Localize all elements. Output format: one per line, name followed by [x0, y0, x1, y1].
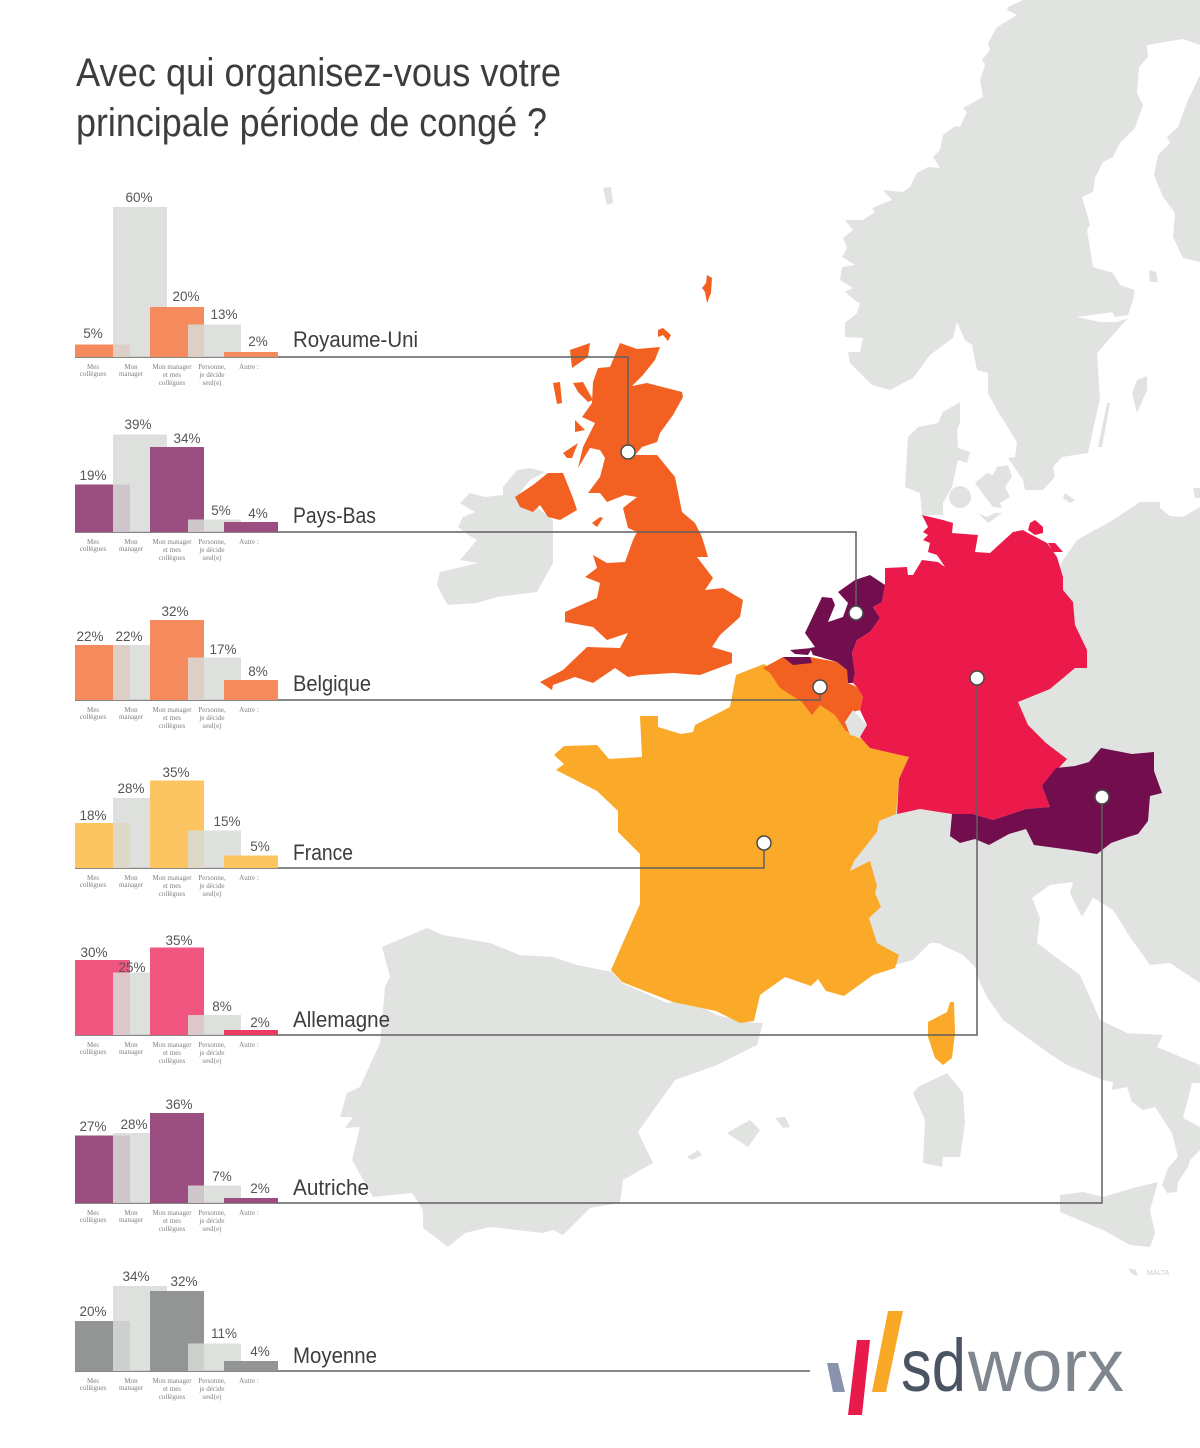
bar chart: Autriche: collègues	[159, 1225, 185, 1233]
bar chart: France: Personne,	[198, 874, 226, 882]
bar chart: Moyenne: Mon manager	[152, 1377, 192, 1385]
bar chart: Royaume-Uni: 5%	[83, 326, 103, 341]
bar chart: Moyenne: et mes	[163, 1385, 181, 1393]
connector: Royaume-Uni	[75, 357, 635, 459]
bar chart: Allemagne: Mes	[87, 1041, 99, 1049]
connector: Allemagne	[75, 671, 984, 1035]
bar chart: France: 18%	[79, 808, 107, 823]
bar chart: France: 5%	[250, 839, 270, 854]
bar chart: Belgique: Mon	[124, 706, 138, 714]
title	[76, 51, 561, 145]
bar chart: Pays-Bas	[75, 417, 376, 562]
bar chart: Allemagne	[75, 933, 390, 1065]
map: small map caption: MALTA	[1147, 1270, 1170, 1277]
bar chart: Moyenne: Mon	[124, 1377, 138, 1385]
bar chart: France: collègues	[80, 881, 106, 889]
bar chart: Allemagne: 25%	[118, 960, 146, 975]
bar chart: Royaume-Uni: 2%	[248, 334, 268, 349]
bar chart: Allemagne: Autre :	[239, 1041, 259, 1049]
bar chart: Belgique: Belgique	[293, 671, 371, 696]
bar chart: France	[75, 765, 353, 898]
bar chart: France: France	[293, 840, 353, 865]
bar chart: Royaume-Uni: 20%	[172, 289, 200, 304]
bar chart: Royaume-Uni: Mon	[124, 363, 138, 371]
bar chart: Autriche: seul(e)	[202, 1225, 222, 1233]
bar chart: Allemagne: collègues	[80, 1048, 106, 1056]
bar chart: Royaume-Uni: je décide	[198, 371, 225, 379]
bar chart: France: Mon manager	[152, 874, 192, 882]
bar chart: Allemagne: je décide	[198, 1049, 225, 1057]
bar chart: Autriche: 2%	[250, 1181, 270, 1196]
bar chart: Allemagne: et mes	[163, 1049, 181, 1057]
bar chart: Belgique: Personne,	[198, 706, 226, 714]
bar chart: Pays-Bas: Mes	[87, 538, 99, 546]
bar chart: Moyenne: je décide	[198, 1385, 225, 1393]
bar chart: Royaume-Uni: Autre :	[239, 363, 259, 371]
bar chart: Moyenne: Personne,	[198, 1377, 226, 1385]
bar chart: Autriche: je décide	[198, 1217, 225, 1225]
bar chart: Pays-Bas: collègues	[159, 554, 185, 562]
bar chart: Pays-Bas: je décide	[198, 546, 225, 554]
bar chart: Belgique: 22%	[76, 629, 104, 644]
bar chart: Pays-Bas: 39%	[124, 417, 152, 432]
bar chart: Autriche: Mes	[87, 1209, 99, 1217]
bar chart: Pays-Bas: 34%	[173, 431, 201, 446]
bar chart: Pays-Bas: Mon	[124, 538, 138, 546]
bar chart: Autriche: Mon manager	[152, 1209, 192, 1217]
bar chart: Belgique: 22%	[115, 629, 143, 644]
bar chart: Belgique: 17%	[209, 642, 237, 657]
bar chart: Moyenne: Mes	[87, 1377, 99, 1385]
bar chart: France: Autre :	[239, 874, 259, 882]
bar chart: France: Mes	[87, 874, 99, 882]
map: Belgique	[763, 657, 863, 735]
bar chart: Moyenne: collègues	[159, 1393, 185, 1401]
bar chart: Royaume-Uni: et mes	[163, 371, 181, 379]
bar chart: France: et mes	[163, 882, 181, 890]
bar chart: Pays-Bas: Mon manager	[152, 538, 192, 546]
bar chart: Autriche: 27%	[79, 1119, 107, 1134]
bar chart: Autriche: Mon	[124, 1209, 138, 1217]
bar chart: Belgique: je décide	[198, 714, 225, 722]
connector: Moyenne	[75, 1370, 810, 1372]
map: Pays-Bas	[783, 575, 885, 683]
bar chart: France: 35%	[162, 765, 190, 780]
bar chart: Moyenne: 34%	[122, 1269, 150, 1284]
bar chart: Allemagne: collègues	[159, 1057, 185, 1065]
bar chart: Royaume-Uni: collègues	[80, 370, 106, 378]
bar chart: Pays-Bas: 5%	[211, 503, 231, 518]
map: Luxembourg	[845, 710, 867, 737]
logo: sdworx	[827, 1311, 1124, 1415]
map: grey Europe background	[340, 0, 1200, 1276]
bar chart: Belgique: collègues	[80, 713, 106, 721]
bar chart: Belgique: 8%	[248, 664, 268, 679]
bar chart: Autriche: 28%	[120, 1117, 148, 1132]
logo: sdworx: sd	[901, 1324, 966, 1407]
bar chart: Pays-Bas: et mes	[163, 546, 181, 554]
bar chart: Royaume-Uni	[75, 190, 418, 387]
bar chart: France: je décide	[198, 882, 225, 890]
bar chart: Moyenne: 11%	[211, 1326, 237, 1341]
bar chart: Pays-Bas: manager	[119, 545, 144, 553]
bar chart: Allemagne: Mon	[124, 1041, 138, 1049]
bar chart: Moyenne: collègues	[80, 1384, 106, 1392]
map: Autriche	[950, 748, 1162, 854]
bar chart: Allemagne: Personne,	[198, 1041, 226, 1049]
bar chart: France: 15%	[213, 814, 241, 829]
bar chart: Moyenne: seul(e)	[202, 1393, 222, 1401]
bar chart: Royaume-Uni: Royaume-Uni	[293, 327, 418, 352]
bar chart: France: seul(e)	[202, 890, 222, 898]
connector: Autriche	[75, 790, 1109, 1203]
bar chart: Belgique: Mes	[87, 706, 99, 714]
connector: Belgique	[75, 680, 827, 700]
bar chart: Moyenne: Moyenne	[293, 1343, 377, 1368]
bar chart: Belgique: collègues	[159, 722, 185, 730]
bar chart: Royaume-Uni: manager	[119, 370, 144, 378]
bar chart: Autriche: collègues	[80, 1216, 106, 1224]
connector: Pays-Bas	[75, 532, 863, 620]
map: Royaume-Uni	[515, 275, 743, 690]
bar chart: Moyenne: Autre :	[239, 1377, 259, 1385]
bar chart: Moyenne	[75, 1269, 377, 1401]
bar chart: Royaume-Uni: seul(e)	[202, 379, 222, 387]
map: France	[554, 664, 955, 1065]
bar chart: Pays-Bas: Pays-Bas	[293, 503, 376, 528]
bar chart: Allemagne: 2%	[250, 1015, 270, 1030]
bar chart: Moyenne: 4%	[250, 1344, 270, 1359]
bar chart: Moyenne: 32%	[170, 1274, 198, 1289]
bar chart: Pays-Bas: 19%	[79, 468, 107, 483]
bar chart: Autriche: 36%	[165, 1097, 193, 1112]
bar chart: Royaume-Uni: collègues	[159, 379, 185, 387]
bar chart: Pays-Bas: Autre :	[239, 538, 259, 546]
bar chart: Belgique: manager	[119, 713, 144, 721]
bar chart: Allemagne: 35%	[165, 933, 193, 948]
bar chart: Autriche: 7%	[212, 1169, 232, 1184]
bar chart: Belgique: Autre :	[239, 706, 259, 714]
bar chart: Autriche	[75, 1097, 369, 1233]
bar chart: Allemagne: 8%	[212, 999, 232, 1014]
bar chart: Pays-Bas: Personne,	[198, 538, 226, 546]
connector: France	[75, 836, 771, 868]
bar chart: Autriche: Autriche	[293, 1175, 369, 1200]
bar chart: Pays-Bas: 4%	[248, 506, 268, 521]
bar chart: Allemagne: Allemagne	[293, 1007, 390, 1032]
bar chart: Royaume-Uni: 13%	[210, 307, 238, 322]
title: Avec qui organisez-vous votre	[76, 51, 561, 95]
bar chart: Royaume-Uni: Mon manager	[152, 363, 192, 371]
bar chart: Allemagne: Mon manager	[152, 1041, 192, 1049]
logo: sdworx: worx	[967, 1324, 1124, 1407]
bar chart: Pays-Bas: seul(e)	[202, 554, 222, 562]
bar chart: France: Mon	[124, 874, 138, 882]
bar chart: Pays-Bas: collègues	[80, 545, 106, 553]
bar chart: Moyenne: 20%	[79, 1304, 107, 1319]
bar chart: Allemagne: manager	[119, 1048, 144, 1056]
bar chart: Belgique: Mon manager	[152, 706, 192, 714]
bar chart: Allemagne: 30%	[80, 945, 108, 960]
bar chart: Royaume-Uni: Personne,	[198, 363, 226, 371]
bar chart: Belgique: 32%	[161, 604, 189, 619]
bar chart: Autriche: Personne,	[198, 1209, 226, 1217]
bar chart: Royaume-Uni: Mes	[87, 363, 99, 371]
bar chart: Belgique: seul(e)	[202, 722, 222, 730]
bar chart: France: collègues	[159, 890, 185, 898]
bar chart: Belgique	[75, 604, 371, 730]
bar chart: Allemagne: seul(e)	[202, 1057, 222, 1065]
bar chart: France: manager	[119, 881, 144, 889]
bar chart: Autriche: Autre :	[239, 1209, 259, 1217]
bar chart: Autriche: et mes	[163, 1217, 181, 1225]
bar chart: France: 28%	[117, 781, 145, 796]
bar chart: Royaume-Uni: 60%	[125, 190, 153, 205]
map: Allemagne	[852, 515, 1087, 820]
bar chart: Autriche: manager	[119, 1216, 144, 1224]
title: principale période de congé ?	[76, 101, 547, 145]
bar chart: Moyenne: manager	[119, 1384, 144, 1392]
bar chart: Belgique: et mes	[163, 714, 181, 722]
